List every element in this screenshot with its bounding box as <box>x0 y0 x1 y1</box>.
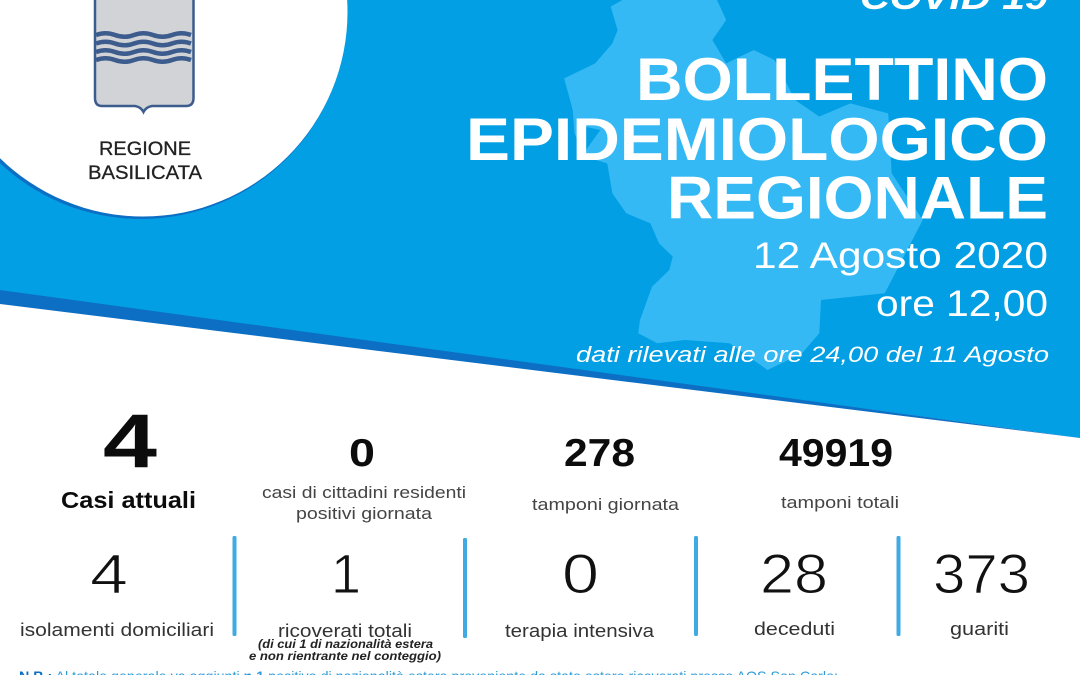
stat: ricoverati totali <box>249 542 441 663</box>
title: EPIDEMIOLOGICO <box>466 106 1048 173</box>
title <box>466 46 1048 232</box>
ricoverati note <box>249 639 441 663</box>
stat: deceduti: 28 <box>760 542 828 605</box>
map of Basilicata <box>564 0 923 370</box>
stat: isolamenti domiciliari: 4 <box>90 542 128 605</box>
stat: tamponi totali: tamponi totali <box>781 493 899 512</box>
stat: casi attuali: Casi attuali <box>61 487 196 513</box>
logo caption <box>88 139 202 184</box>
divider <box>896 536 900 636</box>
stat: tamponi totali <box>779 432 899 512</box>
stat: isolamenti domiciliari <box>20 542 214 640</box>
stat: terapia intensiva <box>505 542 655 641</box>
stat: casi attuali: 4 <box>103 399 157 484</box>
date: 12 Agosto 2020 <box>753 235 1048 276</box>
stat: casi residenti <box>262 432 466 523</box>
ricoverati note: (di cui 1 di nazionalità estera <box>258 639 434 651</box>
divider <box>232 536 236 636</box>
icon: region shield <box>95 0 194 112</box>
time: ore 12,00 <box>876 283 1048 324</box>
logo caption: REGIONE <box>99 139 191 160</box>
stat: terapia intensiva: 0 <box>562 542 599 605</box>
stat: casi attuali <box>61 399 196 513</box>
title: REGIONALE <box>667 164 1048 232</box>
stat: tamponi giornata: 278 <box>564 432 635 475</box>
stat: terapia intensiva: terapia intensiva <box>505 621 655 641</box>
stat: deceduti: deceduti <box>754 619 835 639</box>
divider <box>694 536 698 636</box>
stat: guariti: 373 <box>933 542 1030 605</box>
stat: guariti <box>933 542 1030 639</box>
title: BOLLETTINO <box>636 46 1048 113</box>
stat: tamponi giornata <box>532 432 680 514</box>
stat: tamponi totali: 49919 <box>779 432 893 475</box>
stat: casi residenti: casi di cittadini residenti <box>262 483 466 502</box>
stat: casi residenti: positivi giornata <box>296 504 433 523</box>
stat: guariti: guariti <box>950 619 1009 639</box>
stat: ricoverati totali: 1 <box>331 542 361 605</box>
ricoverati note: e non rientrante nel conteggio) <box>249 651 441 663</box>
data note: dati rilevati alle ore 24,00 del 11 Agosto <box>576 342 1049 367</box>
logo caption: BASILICATA <box>88 163 202 184</box>
divider <box>463 538 467 638</box>
logo circle <box>0 0 348 219</box>
stat: isolamenti domiciliari: isolamenti domiciliari <box>20 620 214 640</box>
stat: ricoverati totali: ricoverati totali <box>278 621 412 641</box>
heading block <box>466 0 1049 367</box>
stat: tamponi giornata: tamponi giornata <box>532 495 680 514</box>
stat: casi residenti: 0 <box>349 432 375 475</box>
stat: deceduti <box>754 542 835 639</box>
